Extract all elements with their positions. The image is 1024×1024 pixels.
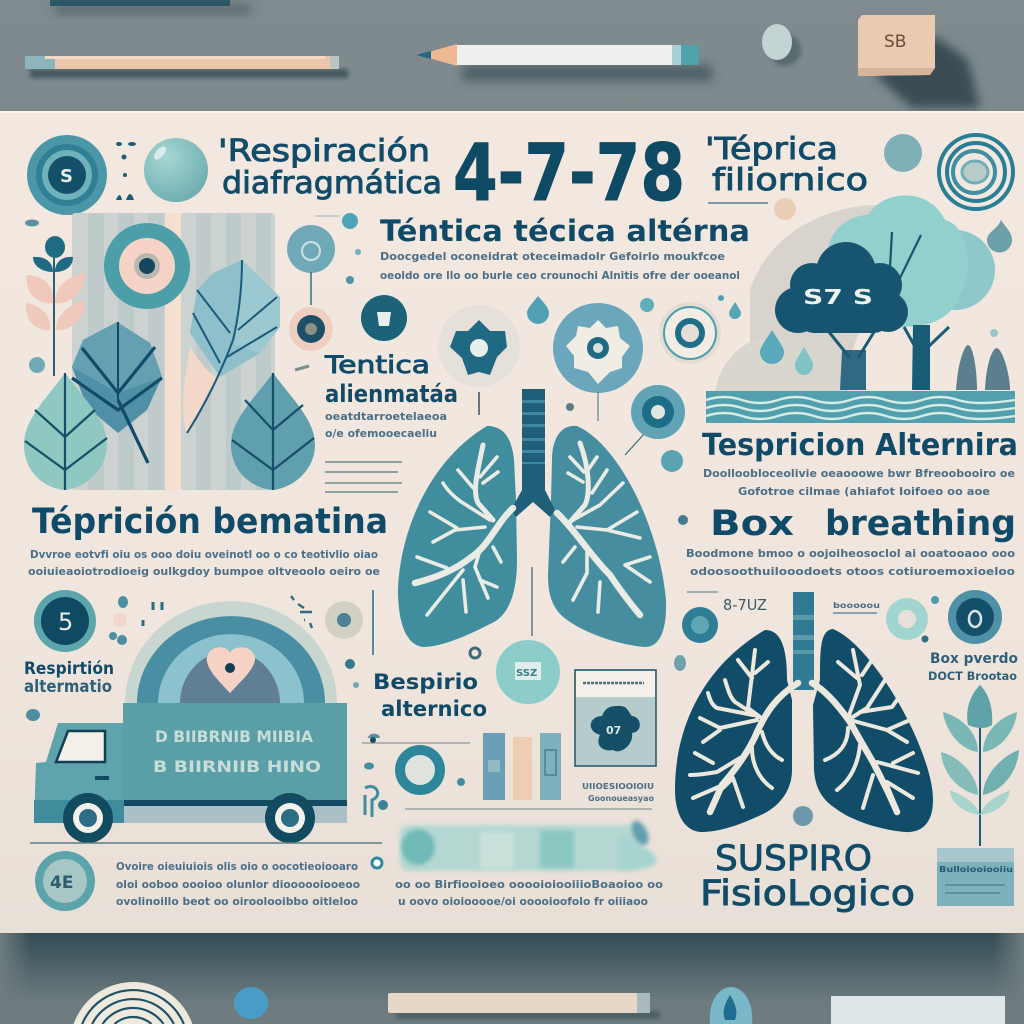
- text block: left middle: oeatdtarroetelaeoa: [325, 410, 447, 423]
- heading: Box breathing: [678, 504, 1016, 544]
- title: 4-7-78: 4-7-78: [453, 129, 685, 219]
- icon: blue bead: [234, 987, 268, 1019]
- heading: Tespricion Alternira: Tespricion Alternira: [702, 428, 1018, 463]
- icon: dark badge: [361, 295, 407, 341]
- bottom desk objects: [74, 982, 1005, 1024]
- text: tiny caption right of bars: [582, 782, 655, 803]
- badge: number 5: 5: [58, 608, 73, 636]
- wheels: [63, 793, 315, 843]
- text block: bottom left: Ovoire oieuiuiois olis oio o oocotieoiooaro: [116, 860, 358, 873]
- heading: Suspiro Fisiologico: [700, 839, 915, 914]
- title: Téprica filiornico: filiornico: [712, 163, 868, 198]
- heading: Tentica alienmatáa: [324, 351, 458, 408]
- icon: grey target: [325, 601, 363, 639]
- decorative dots: above truck: [26, 596, 312, 721]
- icon: dark target: [948, 590, 1002, 644]
- right lung: [813, 629, 933, 832]
- text block: left: ooiuieaoiotrodioeig oulkgdoy bumpoe oltveoolo oeiro oe: [28, 565, 380, 578]
- icon: teal sphere: [144, 138, 208, 202]
- right lung: [548, 426, 666, 647]
- badge: mint circle: SSZ: [516, 668, 537, 679]
- title: Respiración diafragmática: diafragmática: [222, 166, 442, 201]
- icon: pencil bottom: [388, 993, 660, 1019]
- decorative vertical pin: [345, 590, 373, 688]
- icon: heart: [207, 647, 255, 693]
- heading: Suspiro Fisiologico: SUSPIRO: [715, 839, 872, 879]
- decorative line: [362, 737, 470, 743]
- title: Téprica filiornico: [705, 132, 868, 198]
- icon: grey flower badge: [438, 305, 520, 387]
- icon: drop: [987, 220, 1012, 252]
- label: Box pverdo: [928, 651, 1018, 683]
- icon: teal starburst badge: [553, 303, 643, 421]
- label: Box pverdo: Box pverdo: [930, 651, 1018, 667]
- icon: pencil centre: [416, 44, 699, 66]
- heading: Tentica alienmatáa: alienmatáa: [325, 380, 458, 408]
- illustration: truck: D BIIBRNIB MIIBIA: [155, 727, 314, 746]
- heading: Téprición bematina: Téprición bematina: [32, 502, 388, 542]
- trunks: [840, 350, 866, 390]
- left lung: [675, 630, 792, 832]
- dark cloud: [775, 242, 908, 333]
- text: tiny caption right of bars: UIIOESIOOIOIU: [582, 782, 654, 791]
- illustration: lungs bottom: [675, 592, 933, 832]
- text block: right lower: Boodmone bmoo o oojoiheosoclol ai ooatooaoo ooo: [686, 547, 1015, 560]
- title: Respiración diafragmática: 'Respiración: [218, 134, 430, 169]
- icon: pink target: [104, 223, 190, 309]
- trachea: [511, 389, 555, 517]
- text block: top centre: [380, 250, 740, 282]
- icon: ringed teal circle with pointer: [625, 385, 685, 455]
- icon: ring: [395, 745, 465, 795]
- label: 8-7UZ: [687, 592, 767, 614]
- icon: pencil left: [25, 56, 339, 69]
- tree crowns: [915, 230, 995, 310]
- illustration: blurred mint band: [400, 818, 656, 871]
- text: tiny caption right of bars: Goonoueasyao: [588, 794, 655, 803]
- decorative rule: [405, 808, 652, 810]
- trachea: [793, 592, 814, 690]
- decorative dots: left: [25, 220, 309, 373]
- cargo box: [123, 703, 347, 800]
- top desk objects: [25, 0, 980, 108]
- badge: bottom left: [35, 851, 95, 911]
- illustration: waves: [706, 391, 1015, 423]
- illustration: lungs top: [398, 389, 666, 647]
- text block: right upper: Gofotroe cilmae (ahiafot Ioifoeo oo aoe: [738, 485, 990, 498]
- heading: Suspiro Fisiologico: FisioLogico: [700, 874, 915, 914]
- text block: bottom centre: u oovo oioiooooe/oi ooooioofolo fr oiiiaoo: [398, 895, 648, 908]
- callout: circles with connector: [287, 213, 361, 351]
- cones: [956, 345, 977, 390]
- cab: [34, 723, 123, 822]
- heading: Bespirio alternico: Bespirio: [373, 670, 478, 694]
- icon: plant: [941, 685, 1019, 846]
- text block: right upper: [703, 467, 1015, 498]
- raindrops: [760, 330, 784, 364]
- badge: top left ring: S: [60, 166, 73, 187]
- heading: Téntica técica altérna: Téntica técica altérna: [380, 214, 750, 248]
- title: Téprica filiornico: 'Téprica: [705, 132, 838, 167]
- icon: small plant: [26, 236, 85, 376]
- leaf: mint: [24, 373, 107, 490]
- heading: Box breathing: breathing: [825, 504, 1016, 544]
- badge: top left ring: [27, 135, 107, 215]
- text block: left: [28, 548, 380, 578]
- illustration: arch with heart: [125, 601, 337, 703]
- badge: mint circle: [496, 567, 560, 704]
- dark cloud: S7 S: [803, 285, 873, 309]
- decorative mark: [708, 202, 768, 204]
- text block: bottom centre: oo oo Birfiooioeo ooooioiooiiioBoaoioo oo: [395, 878, 663, 891]
- icon: eraser: [858, 15, 935, 76]
- panel: small box label: Bulloiooiooiiu: [939, 865, 1013, 874]
- decorative ground line: [30, 842, 382, 844]
- illustration: truck: [34, 703, 347, 843]
- label: Box pverdo: DOCT Brootao: [928, 669, 1017, 683]
- icon: dark flower: 07: [606, 724, 621, 737]
- icon: spiral rings: [939, 135, 1013, 209]
- text block: bottom left: oloi ooboo oooioo olunlor dioooooiooeoo: [116, 878, 360, 891]
- heading: Bespirio alternico: alternico: [381, 697, 487, 721]
- badge: number 5: [34, 590, 96, 652]
- badge: bottom left: 4E: [50, 873, 73, 893]
- illustration: trees and clouds: [715, 195, 1010, 392]
- icon: swirl badge: [674, 607, 718, 671]
- icon: grey teal disc: [884, 134, 922, 172]
- illustration: striped panel with leaves: [24, 213, 315, 490]
- bottom desk shadow: [4, 933, 1020, 994]
- icon: eraser: SB: [884, 32, 906, 52]
- icon: vertical tick: [478, 392, 480, 415]
- icon: three bars: [483, 733, 561, 800]
- illustration: truck: B BIIRNIIB HINO: [153, 757, 321, 776]
- decorative dots: centre: [527, 295, 741, 472]
- leaf: dark blue diamond: [72, 322, 162, 463]
- heading: Bespirio alternico: [373, 670, 487, 721]
- label: 8-7UZ: 8-7UZ: [723, 596, 767, 614]
- leaf: pale blue: [183, 260, 280, 433]
- text block: top centre: Doocgedel oconeidrat oteceimadolr Gefoirlo moukfcoe: [380, 250, 725, 263]
- title: Respiración diafragmática: [218, 134, 442, 201]
- decorative dots: top left: [116, 142, 136, 200]
- text block: bottom left: [116, 860, 360, 908]
- text block: bottom centre: [395, 878, 663, 908]
- text block: bottom left: ovolinoillo beot oo oiroolooibbo oitleloo: [116, 895, 358, 908]
- label: Respirtión altermatio: Respirtión: [24, 659, 114, 679]
- panel: small framed card: [575, 670, 656, 766]
- heading: Tentica alienmatáa: Tentica: [324, 351, 430, 379]
- label: Respirtión altermatio: [24, 659, 114, 697]
- decorative rule lines: [325, 462, 402, 492]
- icon: mint donut: [886, 596, 939, 642]
- icon: concentric rings: [659, 302, 721, 364]
- text block: left middle: [325, 410, 447, 440]
- text block: top centre: oeoldo ore llo oo burle ceo crounochi Alnitis ofre der ooeanol: [380, 269, 740, 282]
- text block: right lower: odoosoothuilooodoets otoos cotiuroemoxioeloo: [690, 565, 1015, 578]
- decorative dots: lower middle: [364, 648, 480, 868]
- label: Respirtión altermatio: altermatio: [24, 677, 112, 697]
- text: small caption near lungs: [833, 601, 880, 613]
- left lung: [398, 426, 517, 647]
- panel: small box label: [937, 848, 1014, 906]
- heading: Box breathing: Box: [710, 504, 794, 544]
- text block: left: Dvvroe eotvfi oiu os ooo doiu oveinotl oo o co teotivlio oiao: [30, 548, 378, 561]
- icon: spiral disc: [74, 982, 192, 1024]
- leaf: teal: [231, 373, 315, 490]
- icon: teal bead: [710, 987, 752, 1024]
- backdrop: [750, 205, 880, 390]
- icon: pill: [762, 24, 792, 60]
- icon: white block: [831, 996, 1005, 1024]
- text block: right lower: [686, 547, 1015, 578]
- text block: right upper: Doolloobloceolivie oeaooowe bwr Bfreoobooiro oe: [703, 467, 1015, 480]
- text: small caption near lungs: booooou: [833, 601, 880, 610]
- text block: left middle: o/e ofemooecaeliu: [325, 427, 437, 440]
- icon: peach dot: [774, 198, 796, 220]
